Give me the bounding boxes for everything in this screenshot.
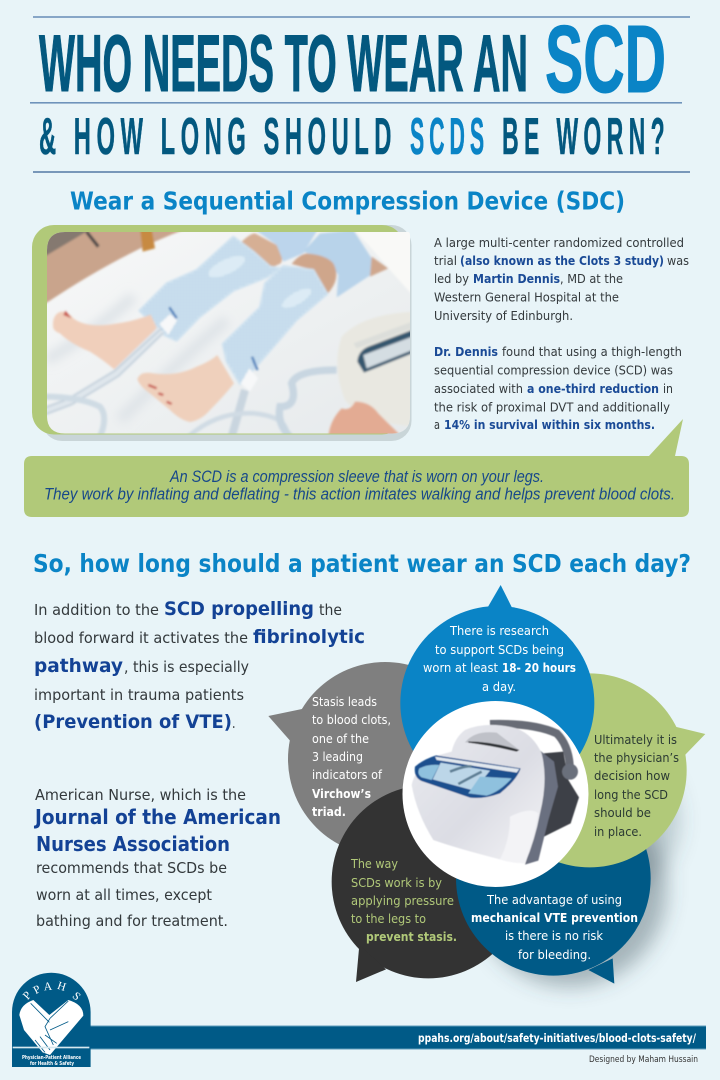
logo: PPAHS: H — [56, 980, 67, 994]
text block: journal recommendation — [33, 786, 281, 930]
petal: how SCDs work, dark: to the legs to — [351, 911, 426, 926]
petal: stasis gray: to blood clots, — [312, 712, 391, 727]
floor behind the bed — [47, 232, 182, 304]
heading: wear a sequential compression device: Wear a Sequential Compression Device (SDC) — [70, 186, 625, 216]
article paragraphs: a one-third reduction — [527, 382, 659, 396]
designer credit: Designed by Maham Hussain — [589, 1055, 698, 1065]
near thigh sleeve — [303, 230, 372, 297]
article paragraphs: in — [663, 382, 673, 396]
article paragraphs: A large multi-center randomized controlled — [434, 236, 684, 250]
petal: stasis gray: indicators of — [312, 767, 383, 782]
petal: stasis gray: Stasis leads — [312, 694, 377, 709]
body — [412, 725, 545, 863]
text block: journal recommendation: Journal of the American — [33, 805, 281, 829]
handle — [465, 732, 519, 750]
article paragraphs: University of Edinburgh. — [434, 309, 573, 323]
logo: PPAHS: Physician-Patient Alliance — [22, 1055, 81, 1061]
text block: fibrinolytic pathway: important in trauma patients — [34, 686, 244, 704]
text block: fibrinolytic pathway: In addition to the — [34, 601, 159, 619]
petal: mechanical prevention, navy — [366, 781, 651, 984]
text block: fibrinolytic pathway: pathway — [34, 655, 124, 677]
article paragraphs: associated with — [434, 382, 523, 396]
title: SCDS — [410, 108, 489, 166]
petal: physician decision, green: Ultimately it is — [594, 732, 677, 747]
text block: fibrinolytic pathway — [34, 598, 365, 733]
controller device — [337, 312, 417, 427]
article paragraphs: (also known as the Clots 3 study) — [460, 254, 664, 268]
article paragraphs: was — [667, 254, 689, 268]
blanket — [359, 232, 410, 292]
title — [30, 6, 690, 173]
petal: physician decision, green: should be — [594, 805, 651, 820]
petal: stasis gray — [268, 662, 482, 856]
near knee skin — [292, 253, 336, 294]
article paragraphs: Western General Hospital at the — [434, 290, 619, 304]
far leg sleeve — [139, 237, 280, 341]
callout: what an SCD is: An SCD is a compression sleeve that is worn on your legs. — [169, 467, 544, 486]
right foot — [137, 355, 234, 422]
text block: fibrinolytic pathway: , this is especially — [124, 658, 249, 676]
article paragraphs: , MD at the — [560, 272, 623, 286]
logo: PPAHS: for Health & Safety — [30, 1061, 75, 1067]
petal: mechanical prevention, navy: for bleeding. — [518, 947, 591, 962]
text block: journal recommendation: recommends that SCDs be — [36, 859, 227, 877]
text block: journal recommendation: worn at all times, except — [36, 886, 212, 904]
petal: how SCDs work, dark: SCDs work is by — [351, 875, 443, 890]
petal: stasis gray: one of the — [312, 731, 369, 746]
article paragraphs: the risk of proximal DVT and additionally — [434, 400, 670, 414]
petal: mechanical prevention, navy: is there is no risk — [505, 928, 604, 943]
tubes — [43, 330, 162, 412]
petal: physician decision, green: in place. — [594, 824, 642, 839]
left foot — [53, 312, 157, 370]
text block: journal recommendation: Nurses Association — [36, 832, 230, 856]
logo: PPAHS: S — [70, 990, 83, 1003]
near leg sleeve — [223, 266, 327, 384]
hand — [328, 402, 402, 437]
article paragraphs: led by — [434, 272, 469, 286]
petal: mechanical prevention, navy: The advantage of using — [486, 892, 622, 907]
petal: stasis gray: triad. — [312, 804, 346, 819]
petal: research hours, blue: 18- 20 hours — [502, 660, 576, 675]
soft sheet shading — [47, 297, 227, 420]
text block: fibrinolytic pathway: the — [319, 601, 342, 619]
logo: PPAHS — [12, 973, 91, 1067]
text block: fibrinolytic pathway: fibrinolytic — [253, 626, 365, 648]
far leg knee skin — [240, 233, 282, 269]
petal: mechanical prevention, navy: mechanical VTE prevention — [471, 910, 638, 925]
article paragraphs: found that using a thigh-length — [502, 345, 682, 359]
footer band with URL — [88, 1026, 706, 1050]
logo: PPAHS: A — [43, 981, 53, 993]
control panel — [415, 755, 521, 798]
petal: physician decision, green: long the SCD — [594, 787, 668, 802]
petal: physician decision, green: the physician’s — [594, 750, 679, 765]
article paragraphs: Dr. Dennis — [434, 345, 498, 359]
logo: PPAHS: P — [21, 990, 34, 1002]
petal: how SCDs work, dark: The way — [350, 856, 399, 871]
petal: research hours, blue: There is research — [449, 623, 549, 638]
text block: fibrinolytic pathway: (Prevention of VTE) — [34, 711, 232, 733]
logo: PPAHS: P — [32, 983, 43, 997]
petal: research hours, blue: to support SCDs being — [435, 642, 564, 657]
prevent stasis emphasis: prevent stasis. — [366, 929, 457, 944]
article paragraphs: 14% in survival within six months. — [444, 418, 655, 432]
article paragraphs: sequential compression device (SCD) was — [434, 364, 673, 378]
callout: what an SCD is — [24, 419, 689, 517]
drop shadow — [473, 740, 680, 987]
petal: how SCDs work, dark: applying pressure — [351, 893, 454, 908]
petal: physician decision, green — [493, 673, 705, 867]
centre disc with compression pump — [402, 701, 588, 887]
text block: fibrinolytic pathway: SCD propelling — [164, 598, 314, 620]
article paragraphs: trial — [434, 254, 457, 268]
text block: journal recommendation: American Nurse, which is the — [35, 786, 246, 804]
petal: research hours, blue — [400, 585, 594, 800]
petal: stasis gray: 3 leading — [312, 749, 363, 764]
strap — [490, 724, 570, 772]
article paragraphs: Martin Dennis — [473, 272, 560, 286]
photo panel: legs wearing compression sleeves — [32, 225, 417, 441]
petal: how SCDs work, dark — [332, 785, 525, 982]
text block: fibrinolytic pathway: . — [232, 714, 236, 732]
petal: research hours, blue: worn at least — [423, 660, 498, 675]
text block: journal recommendation: bathing and for treatment. — [36, 912, 228, 930]
article paragraphs: a — [434, 418, 440, 432]
petal: physician decision, green: decision how — [594, 768, 670, 783]
petal: stasis gray: Virchow’s — [312, 786, 371, 801]
text block: fibrinolytic pathway: blood forward it activates the — [34, 629, 248, 647]
article paragraphs — [434, 236, 689, 432]
connectors — [159, 314, 177, 335]
petal: research hours, blue: a day. — [482, 679, 516, 694]
petal diagram — [268, 585, 705, 987]
